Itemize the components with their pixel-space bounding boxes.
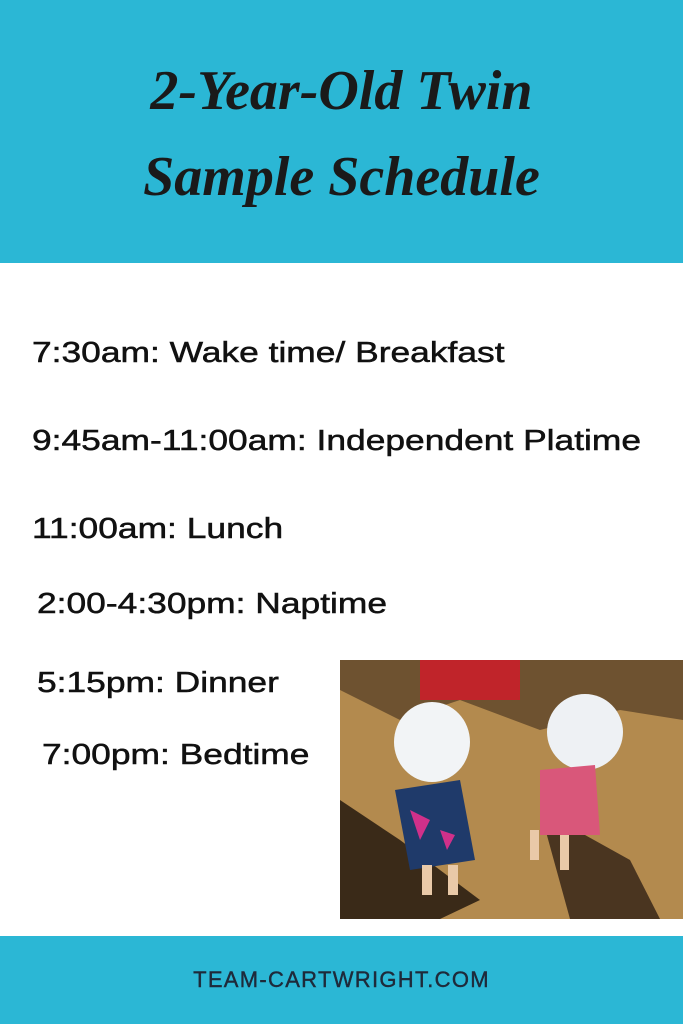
schedule item 2: 9:45am-11:00am: Independent Platime [32, 425, 641, 457]
title [143, 60, 540, 208]
title: 2-Year-Old Twin [150, 60, 533, 122]
schedule item 4: 2:00-4:30pm: Naptime [37, 588, 387, 620]
schedule item 1: 7:30am: Wake time/ Breakfast [32, 337, 505, 369]
schedule item 3: 11:00am: Lunch [32, 513, 283, 545]
footer band [0, 936, 683, 1024]
header band [0, 0, 683, 263]
title: Sample Schedule [143, 146, 540, 208]
footer url: TEAM-CARTWRIGHT.COM [193, 967, 490, 992]
schedule item 6: 7:00pm: Bedtime [42, 739, 309, 771]
schedule item 5: 5:15pm: Dinner [37, 667, 279, 699]
photo: twins on wood chips [340, 660, 683, 919]
